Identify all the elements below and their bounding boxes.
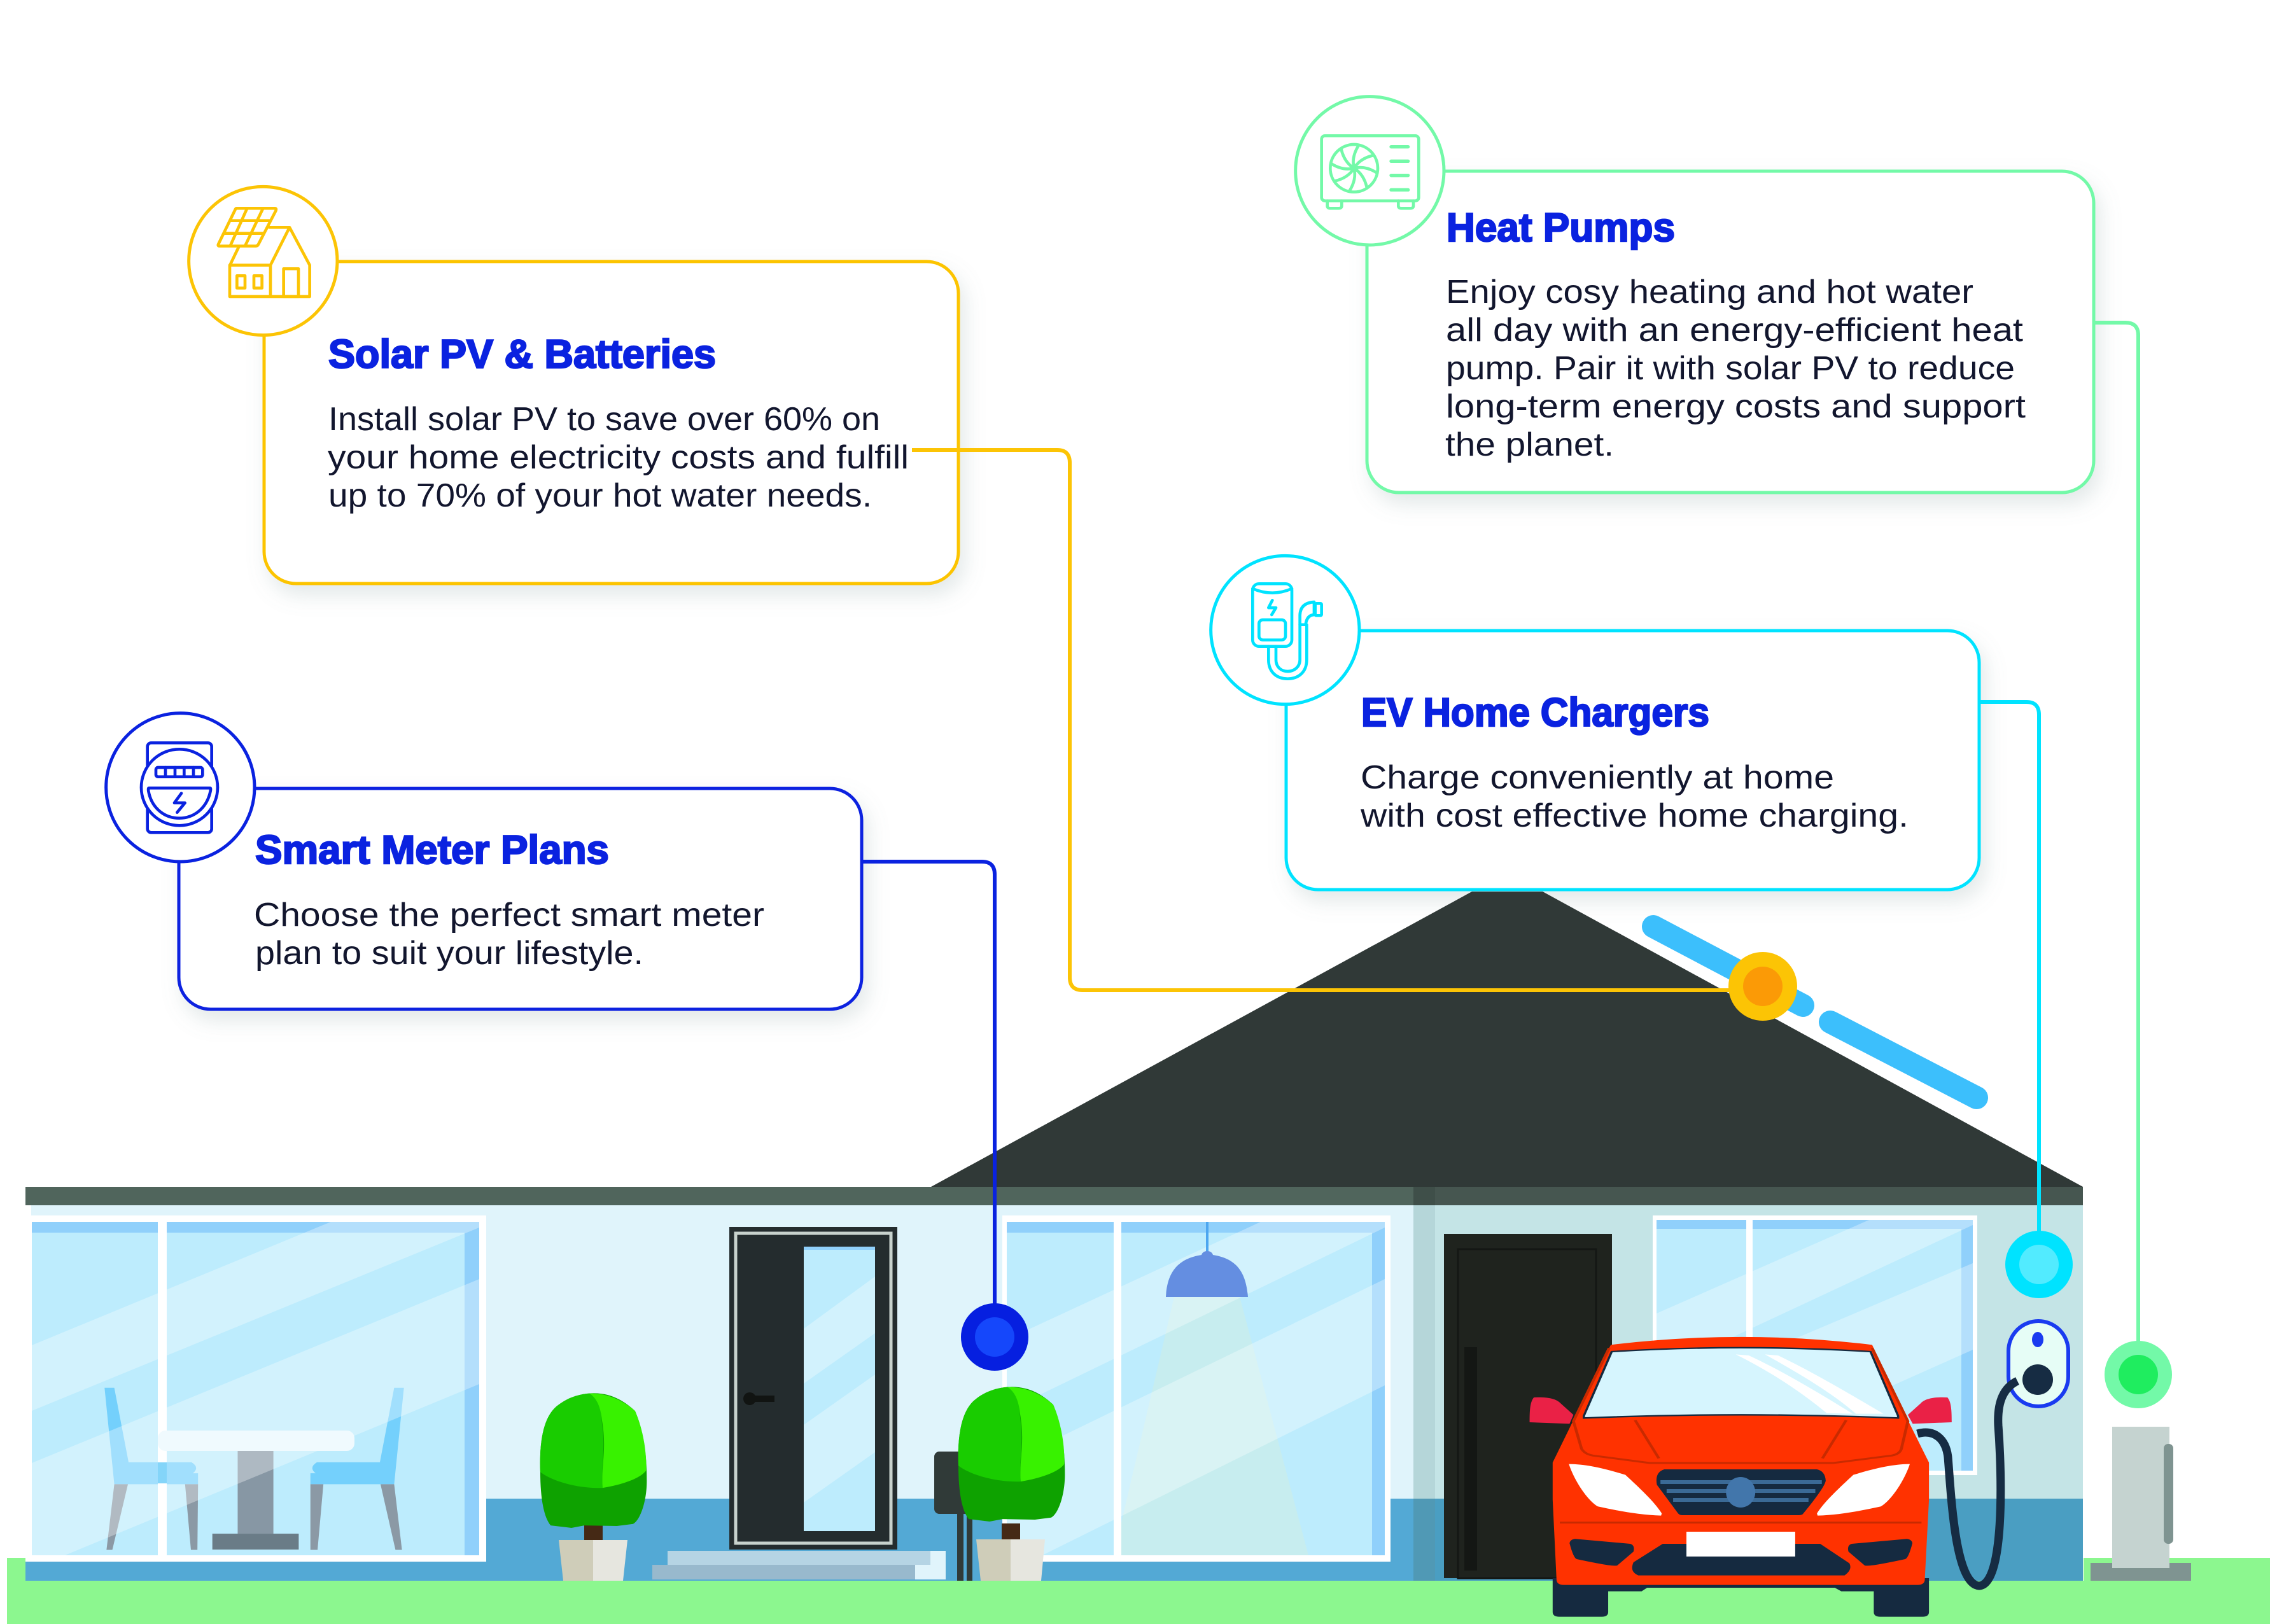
body text: all day with an energy-efficient heat [1446,312,2024,349]
number plate [1686,1532,1795,1557]
wall charger [2008,1321,2068,1406]
left wall [25,1205,1413,1581]
body text: pump. Pair it with solar PV to reduce [1446,350,2015,387]
text: EV Home Chargers [1360,690,1909,834]
lawn [7,1558,2270,1624]
table and chairs [104,1388,404,1550]
charging cable [1917,1381,2017,1586]
panel: Heat Pumps box [1367,171,2094,493]
body text: with cost effective home charging. [1360,797,1909,834]
marker: EV charger [2005,1231,2073,1298]
heading: Smart Meter Plans [255,828,609,872]
body text [1445,274,2026,463]
connector: heat pump [2094,323,2138,1349]
icon: EV charger [1211,556,1359,704]
front door [729,1227,897,1550]
mirrors [1530,1397,1952,1424]
red car [1530,1337,1952,1617]
marker: solar [1728,952,1797,1021]
house illustration [7,892,2270,1624]
hood lines [1560,1348,1921,1523]
body text [254,897,764,972]
panel: Solar PV box [264,262,958,584]
middle window [1002,1215,1391,1562]
text: Solar PV and Batteries [328,332,909,514]
body text: the planet. [1445,426,1614,463]
panel: EV Home Chargers box [1286,631,1979,890]
grille [1657,1469,1826,1515]
left window [25,1215,486,1562]
garage door [1444,1234,1612,1578]
body text: Enjoy cosy heating and hot water [1446,274,1973,311]
headlights [1569,1464,1910,1516]
marker: smart meter [961,1303,1028,1371]
right wall [1413,1205,2083,1581]
icon: heat pump [1296,97,1444,245]
panel: Smart Meter Plans box [179,788,862,1009]
heat pump unit [2091,1427,2191,1581]
right plant [958,1387,1065,1581]
mailbox [934,1452,972,1581]
entry steps [652,1551,946,1579]
body text: up to 70% of your hot water needs. [328,477,872,514]
body text: your home electricity costs and fulfill [328,439,909,476]
body text: Install solar PV to save over 60% on [328,401,880,438]
body text: Charge conveniently at home [1361,759,1834,796]
fog lights and intake [1569,1539,1912,1576]
body text [328,401,909,514]
heading: EV Home Chargers [1361,690,1709,735]
icon: solar house [189,186,337,335]
pendant lamp [1166,1222,1248,1297]
body text: plan to suit your lifestyle. [255,935,643,972]
heading: Heat Pumps [1447,206,1675,250]
body text: Choose the perfect smart meter [254,897,764,934]
connector: smart meter [862,862,995,1311]
connector: EV charger [1979,702,2039,1241]
connector: solar [912,450,1737,990]
roof [931,892,2083,1187]
body text [1360,759,1909,834]
right window [1653,1215,1977,1475]
solar panels on roof [1653,927,1977,1098]
windscreen [1584,1348,1898,1418]
roof fascia [25,1187,2083,1205]
wheels [1553,1578,1929,1617]
icon: smart meter [106,713,255,862]
heading: Solar PV & Batteries [328,332,716,377]
left plant [540,1393,647,1581]
text: Smart Meter Plans [254,828,764,972]
text: Heat Pumps [1445,206,2026,463]
marker: heat pump [2105,1341,2172,1408]
lamp light cone [1114,1297,1308,1555]
body [1553,1337,1929,1585]
body text: long-term energy costs and support [1446,388,2026,425]
